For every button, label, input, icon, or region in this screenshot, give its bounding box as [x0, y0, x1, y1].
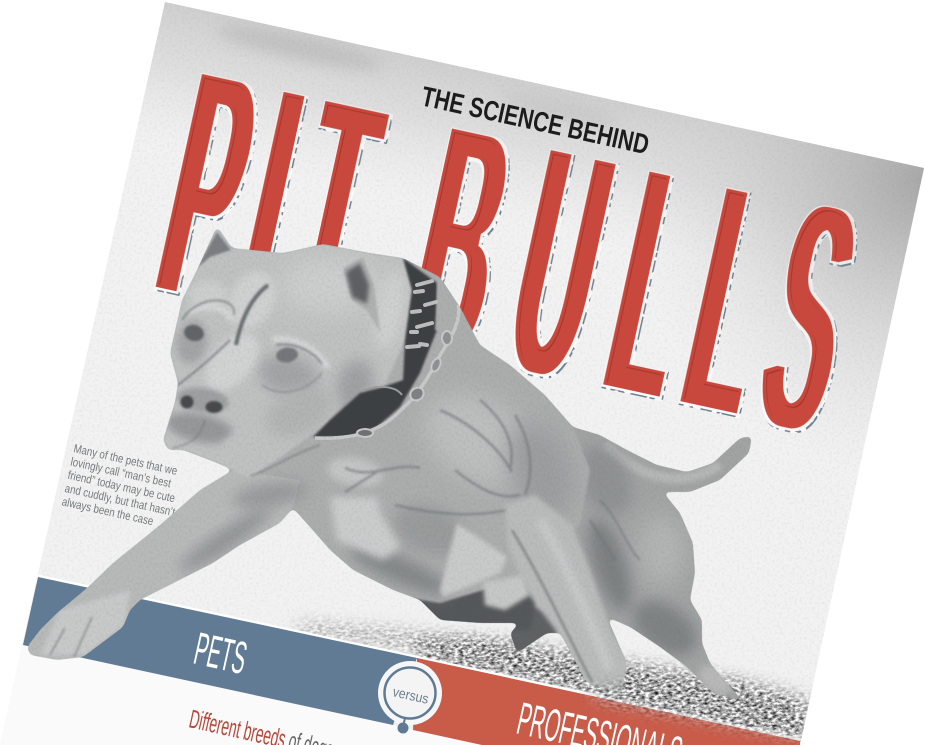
dog: right eye [275, 346, 299, 364]
dog: right ear [343, 257, 380, 332]
banner: professionals [413, 658, 800, 745]
grass over feet [585, 685, 805, 738]
heading: the science behind: THE SCIENCE BEHIND [419, 81, 652, 161]
dog: neck beyond collar [434, 282, 438, 332]
dog: near front leg [505, 495, 630, 696]
label: pets: PETS [190, 622, 251, 684]
dog: belly feather [440, 523, 507, 597]
dog: shoulder highlight [326, 456, 384, 488]
dog: wrinkles [172, 285, 322, 476]
panel: versus banner [20, 574, 800, 745]
icon: versus circle [378, 661, 442, 734]
dog: torso [405, 426, 590, 604]
text block: intro paragraph: always been the case [61, 495, 155, 529]
icon: versus circle: versus [391, 684, 431, 707]
dog: head and neck [163, 226, 412, 478]
banner: pets [23, 577, 417, 725]
text block: intro paragraph: and cuddly, but that hasn’t [63, 482, 176, 519]
dog: left eye [183, 324, 205, 342]
dog: collar spikes [407, 281, 436, 347]
grass [295, 622, 810, 740]
dog: rear haunch and tail [574, 428, 750, 699]
illustration: pit bull [28, 229, 752, 700]
dog: chain [315, 305, 459, 438]
dog: fur texture [0, 200, 800, 730]
dog: brow highlights [188, 307, 328, 368]
dog: left ear [197, 232, 231, 268]
dog: muzzle and jowls [206, 333, 259, 390]
text block: intro paragraph: lovingly call “man’s best [69, 456, 172, 491]
dog: chest light patch [330, 497, 400, 560]
dog: eye sockets [173, 318, 211, 366]
text block: intro paragraph: friend” today may be cute [66, 469, 176, 505]
dog: muscle lines [345, 400, 640, 560]
dog: far front leg [27, 470, 300, 660]
title: PIT BULLS: PIT BULLS [136, 0, 880, 507]
text block: intro paragraph: Many of the pets that we [72, 442, 178, 478]
dog: collar buckle [363, 387, 402, 395]
dog: shadows between legs [511, 606, 559, 651]
dog: collar [313, 258, 437, 437]
dog: nose [176, 386, 230, 413]
